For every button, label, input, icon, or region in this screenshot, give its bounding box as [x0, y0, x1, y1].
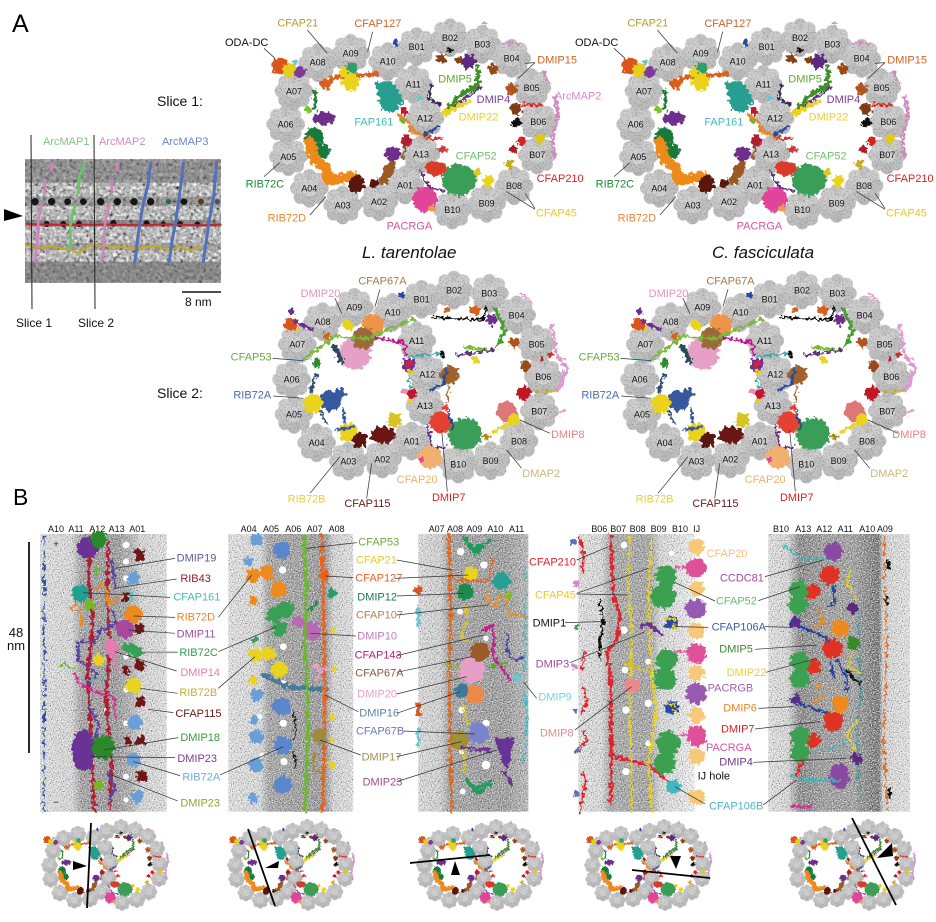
labels for panels 1 and 2: CFAP161	[173, 591, 220, 603]
panel: A10 to A01 view: A13	[109, 524, 125, 534]
doublet cross-section: L. tarentolae slice 2: B10	[450, 459, 466, 469]
ArcMAP2 filaments	[35, 163, 117, 262]
doublet cross-section: C. fasciculata slice 2: B08	[859, 436, 875, 446]
doublet cross-section: C. fasciculata slice 1: A06	[628, 120, 644, 130]
labels for panels 3 to 5: CFAP210	[529, 556, 576, 568]
doublet cross-section: L. tarentolae slice 1: A07	[286, 86, 302, 96]
tomogram captions	[16, 136, 221, 330]
panel letter A: A	[12, 10, 29, 38]
doublet cross-section: C. fasciculata slice 1: CFAP45	[886, 207, 927, 219]
labels for panels 3 to 5: CFAP45	[535, 590, 576, 602]
doublet cross-section: L. tarentolae slice 2: B09	[483, 456, 499, 466]
labels for panels 3 to 5: DMIP4	[719, 756, 753, 768]
doublet cross-section: L. tarentolae slice 1: ODA-DC	[225, 37, 268, 49]
doublet cross-section: L. tarentolae slice 1: DMIP4	[477, 94, 510, 106]
doublet cross-section: C. fasciculata slice 2: A11	[757, 336, 772, 346]
doublet cross-section: L. tarentolae slice 1: CFAP127	[354, 18, 401, 30]
doublet cross-section: L. tarentolae slice 1: A02	[371, 197, 387, 207]
panel: B10 to A09 view: A12	[816, 524, 832, 534]
panel: A07 to A11 view: A10	[487, 524, 503, 534]
plus and minus end markers: +	[53, 539, 59, 550]
panel: A07 to A11 view: A08	[447, 524, 463, 534]
doublet cross-section: L. tarentolae slice 1: A13	[413, 150, 429, 160]
doublet cross-section: L. tarentolae slice 2: A09	[346, 303, 362, 313]
doublet cross-section: L. tarentolae slice 2: B08	[511, 436, 527, 446]
orientation thumbnail 3	[410, 819, 543, 911]
panel: A04 to A08 view: A06	[285, 524, 301, 534]
labels for panels 1 and 2: RIB72A	[182, 771, 221, 783]
panel: A04 to A08 view	[218, 524, 361, 812]
labels for panels 3 to 5: CFAP20	[707, 548, 748, 560]
doublet cross-section: L. tarentolae slice 2: B07	[531, 406, 547, 416]
doublet cross-section: L. tarentolae slice 1: B05	[524, 83, 540, 93]
longitudinal panels 1 and 2	[40, 524, 404, 812]
panel: A04 to A08 view: A08	[329, 524, 345, 534]
doublet cross-section: L. tarentolae slice 1: A05	[280, 152, 296, 162]
doublet cross-section: L. tarentolae slice 1: A10	[380, 57, 396, 67]
doublet cross-section: L. tarentolae slice 2: DMIP7	[432, 492, 466, 504]
doublet cross-section: L. tarentolae slice 2: A11	[409, 336, 424, 346]
doublet cross-section: C. fasciculata slice 2: A07	[637, 340, 653, 350]
orientation thumbnail 1	[41, 819, 168, 911]
doublet cross-section: C. fasciculata slice 1: B06	[880, 117, 896, 127]
yellow CFAP45 strand	[26, 245, 200, 253]
doublet cross-section: L. tarentolae slice 1: B02	[442, 33, 458, 43]
doublet cross-section: C. fasciculata slice 1: A01	[747, 180, 763, 190]
doublet cross-section: L. tarentolae slice 2: A03	[340, 456, 356, 466]
panel: A10 to A01 view: A10	[48, 524, 64, 534]
tomogram captions: ArcMAP3	[162, 136, 208, 148]
doublet cross-section: C. fasciculata slice 1	[575, 17, 934, 232]
panel: B06 to IJ view: B09	[651, 524, 667, 534]
doublet cross-section: C. fasciculata slice 2: RIB72B	[636, 494, 674, 506]
doublet cross-section: C. fasciculata slice 2: A06	[632, 375, 648, 385]
labels for panels 3 to 5: PACRGA	[706, 742, 752, 754]
doublet cross-section: C. fasciculata slice 2: A02	[722, 454, 738, 464]
doublet cross-section: C. fasciculata slice 1: B04	[854, 54, 870, 64]
doublet cross-section: L. tarentolae slice 1: RIB72D	[268, 212, 306, 224]
doublet cross-section: C. fasciculata slice 2: DMAP2	[870, 468, 908, 480]
doublet cross-section: L. tarentolae slice 1: B04	[504, 54, 520, 64]
black microtubule-lumen dots row	[31, 198, 220, 227]
doublet cross-section: C. fasciculata slice 2: B09	[831, 456, 847, 466]
labels for panels 1 and 2: RIB72B	[179, 687, 217, 699]
doublet cross-section: C. fasciculata slice 1: B07	[879, 150, 895, 160]
doublet cross-section: L. tarentolae slice 1: CFAP21	[277, 17, 318, 29]
doublet cross-section: C. fasciculata slice 2: B10	[798, 459, 814, 469]
doublet cross-section: C. fasciculata slice 1: CFAP21	[627, 17, 668, 29]
doublet cross-section: C. fasciculata slice 2	[579, 271, 926, 510]
orientation thumbnail 2	[227, 819, 354, 911]
labels for panels 3 to 5: CFAP52	[716, 596, 757, 608]
doublet cross-section: C. fasciculata slice 1: RIB72D	[618, 212, 656, 224]
doublet cross-section: C. fasciculata slice 1: ODA-DC	[575, 37, 618, 49]
doublet cross-section: L. tarentolae slice 2: A02	[374, 454, 390, 464]
doublet cross-section: C. fasciculata slice 1: DMIP4	[827, 94, 860, 106]
panel: B06 to IJ view: B07	[610, 524, 626, 534]
doublet cross-section: L. tarentolae slice 1: A06	[278, 120, 294, 130]
doublet cross-section: C. fasciculata slice 1: DMIP22	[809, 111, 848, 123]
labels for panels 1 and 2: RIB43	[180, 573, 211, 585]
doublet cross-section: C. fasciculata slice 1: B03	[824, 40, 840, 50]
doublet cross-section: C. fasciculata slice 1: FAP161	[704, 116, 743, 128]
scale bar 48 nm	[7, 542, 29, 753]
doublet cross-section: C. fasciculata slice 2: B01	[762, 295, 778, 305]
labels for panels 1 and 2: CFAP143	[355, 650, 402, 662]
labels for panels 3 to 5: PACRGB	[708, 682, 753, 694]
labels for panels 3 to 5: DMIP6	[723, 703, 757, 715]
labels for panels 1 and 2: DMIP18	[180, 732, 220, 744]
labels for panels 3 to 5: DMIP22	[727, 667, 766, 679]
doublet cross-section: L. tarentolae slice 2: CFAP115	[344, 498, 391, 510]
doublet cross-section: L. tarentolae slice 1	[225, 17, 601, 232]
doublet cross-section: C. fasciculata slice 1: PACRGA	[737, 220, 783, 232]
doublet cross-section: L. tarentolae slice 1: ArcMAP2	[555, 90, 601, 102]
doublet cross-section: C. fasciculata slice 2: RIB72A	[581, 390, 620, 402]
doublet cross-section: L. tarentolae slice 2: DMIP20	[301, 288, 340, 300]
doublet cross-section: L. tarentolae slice 1: B03	[474, 40, 490, 50]
panel letter B: B	[13, 484, 28, 510]
doublet cross-section: C. fasciculata slice 2: DMIP8	[892, 429, 926, 441]
doublet cross-section: C. fasciculata slice 2: B02	[794, 285, 810, 295]
doublet cross-section: L. tarentolae slice 2: B02	[446, 285, 462, 295]
panel: A07 to A11 view: A11	[509, 524, 524, 534]
tomogram captions: Slice 2	[78, 316, 114, 330]
doublet cross-section: L. tarentolae slice 2: B05	[529, 339, 545, 349]
doublet cross-section: L. tarentolae slice 1: DMIP22	[459, 111, 498, 123]
doublet cross-section: L. tarentolae slice 2: CFAP53	[231, 352, 272, 364]
doublet cross-section: L. tarentolae slice 2: CFAP20	[397, 474, 438, 486]
labels for panels 1 and 2: DMIP11	[177, 629, 216, 641]
doublet cross-section: C. fasciculata slice 1: B05	[874, 83, 890, 93]
labels for panels 1 and 2: CFAP67A	[355, 667, 404, 679]
labels for panels 3 to 5: DMIP3	[536, 659, 569, 671]
doublet cross-section: C. fasciculata slice 2: A10	[733, 308, 749, 318]
doublet cross-section: L. tarentolae slice 1: B01	[409, 42, 425, 52]
doublet cross-section: L. tarentolae slice 1: CFAP45	[536, 207, 577, 219]
doublet cross-section: L. tarentolae slice 1: CFAP210	[537, 173, 584, 185]
doublet cross-section: L. tarentolae slice 2	[231, 271, 585, 510]
panel: B10 to A09 view: A11	[838, 524, 853, 534]
labels for panels 3 to 5: CFAP106B	[709, 800, 763, 812]
labels for panels 3 to 5: DMIP8	[540, 727, 574, 739]
panel: A10 to A01 view: A12	[89, 524, 105, 534]
doublet cross-section: L. tarentolae slice 1: A03	[335, 200, 351, 210]
doublet cross-section: C. fasciculata slice 1: CFAP52	[806, 150, 847, 162]
labels for panels 1 and 2: DMIP19	[177, 553, 216, 565]
doublet cross-section: C. fasciculata slice 1: A11	[756, 80, 771, 90]
doublet cross-section: L. tarentolae slice 2: A05	[286, 410, 302, 420]
ArcMAP1 filament	[67, 163, 85, 248]
doublet cross-section: L. tarentolae slice 2: RIB72A	[233, 390, 272, 402]
panel: B10 to A09 view: A09	[877, 524, 893, 534]
doublet cross-section: C. fasciculata slice 1: DMIP5	[788, 74, 822, 86]
panel: A07 to A11 view: A07	[429, 524, 445, 534]
plus and minus end markers: −	[53, 797, 59, 808]
doublet cross-section: C. fasciculata slice 2: CFAP67A	[706, 275, 755, 287]
doublet cross-section: C. fasciculata slice 2: A09	[694, 303, 710, 313]
doublet cross-section: C. fasciculata slice 1: B09	[829, 199, 845, 209]
doublet cross-section: L. tarentolae slice 1: CFAP52	[456, 150, 497, 162]
orientation thumbnail 4	[584, 819, 711, 911]
doublet cross-section: C. fasciculata slice 1: A08	[660, 58, 676, 68]
doublet cross-section: L. tarentolae slice 2: RIB72B	[288, 494, 326, 506]
labels for panels 1 and 2: DMIP10	[357, 631, 397, 643]
panel: B10 to A09 view: A10	[859, 524, 875, 534]
scale bar 48 nm: nm	[7, 638, 25, 653]
scale bar 48 nm: 48	[9, 625, 23, 640]
labels for panels 3 to 5: DMIP9	[538, 691, 572, 703]
doublet cross-section: C. fasciculata slice 1: A04	[651, 184, 667, 194]
orientation thumbnail 5	[788, 818, 915, 911]
doublet cross-section: L. tarentolae slice 2: DMAP2	[522, 468, 560, 480]
labels for panels 1 and 2: DMIP20	[357, 689, 397, 701]
labels for panels 1 and 2: CFAP53	[358, 536, 399, 548]
doublet cross-section: C. fasciculata slice 2: A04	[657, 438, 673, 448]
tomogram captions: 8 nm	[185, 295, 212, 309]
panel: B06 to IJ view: B06	[591, 524, 607, 534]
doublet cross-section: C. fasciculata slice 2: A12	[767, 369, 783, 379]
species label L. tarentolae: L. tarentolae	[362, 243, 457, 262]
doublet cross-section: C. fasciculata slice 2: B04	[857, 310, 873, 320]
doublet cross-section: C. fasciculata slice 1: B08	[856, 181, 872, 191]
labels for panels 3 to 5: CCDC81	[720, 572, 764, 584]
tomogram captions: ArcMAP2	[99, 136, 145, 148]
panel: A07 to A11 view	[395, 524, 537, 812]
doublet cross-section: L. tarentolae slice 2: A06	[284, 375, 300, 385]
labels for panels 1 and 2	[173, 536, 404, 809]
tomogram captions: ArcMAP1	[43, 136, 89, 148]
doublet cross-section: L. tarentolae slice 1: A08	[310, 58, 326, 68]
labels for panels 3 to 5: CFAP106A	[712, 621, 767, 633]
doublet cross-section: C. fasciculata slice 2: DMIP20	[649, 288, 688, 300]
doublet cross-section: C. fasciculata slice 1: B01	[759, 42, 775, 52]
labels for panels 1 and 2: DMIP23	[177, 753, 217, 765]
doublet cross-section: L. tarentolae slice 1: DMIP15	[537, 55, 577, 67]
doublet cross-section: C. fasciculata slice 2: CFAP115	[692, 498, 739, 510]
labels for panels 1 and 2: DMIP17	[362, 751, 401, 763]
doublet cross-section: L. tarentolae slice 2: A04	[309, 438, 325, 448]
doublet cross-section: C. fasciculata slice 1: A03	[685, 200, 701, 210]
doublet cross-section: L. tarentolae slice 2: B04	[509, 310, 525, 320]
doublet cross-section: L. tarentolae slice 1: FAP161	[354, 116, 393, 128]
doublet cross-section: C. fasciculata slice 2: B06	[883, 372, 899, 382]
labels for panels 3 to 5: IJ hole	[698, 770, 730, 782]
red CFAP210 strand	[27, 224, 221, 225]
doublet cross-section: L. tarentolae slice 2: A07	[289, 340, 305, 350]
panel: A07 to A11 view: A09	[466, 524, 482, 534]
doublet cross-section: C. fasciculata slice 2: A01	[752, 436, 768, 446]
doublet cross-section: L. tarentolae slice 1: DMIP5	[438, 74, 472, 86]
doublet cross-section: C. fasciculata slice 1: A10	[730, 57, 746, 67]
doublet cross-section: C. fasciculata slice 2: B07	[879, 406, 895, 416]
labels for panels 1 and 2: DMIP16	[359, 707, 399, 719]
panel: A10 to A01 view	[40, 524, 180, 812]
doublet cross-section: C. fasciculata slice 1: A02	[721, 197, 737, 207]
labels for panels 1 and 2: DMIP14	[180, 667, 220, 679]
labels for panels 1 and 2: CFAP115	[175, 708, 222, 720]
doublet cross-section: C. fasciculata slice 1: A12	[767, 114, 783, 124]
doublet cross-section: L. tarentolae slice 1: RIB72C	[246, 179, 284, 191]
labels for panels 1 and 2: DMIP23	[180, 797, 220, 809]
panel: A10 to A01 view: A11	[68, 524, 84, 534]
doublet cross-section: C. fasciculata slice 2: A13	[765, 401, 781, 411]
panel: A10 to A01 view: A01	[129, 524, 145, 534]
panel: B06 to IJ view: B10	[672, 524, 688, 534]
doublet cross-section: C. fasciculata slice 2: CFAP53	[579, 352, 620, 364]
labels for panels 1 and 2: CFAP21	[356, 555, 397, 567]
doublet cross-section: L. tarentolae slice 1: B09	[479, 199, 495, 209]
labels for panels 1 and 2: CFAP107	[356, 610, 403, 622]
doublet cross-section: L. tarentolae slice 1: B06	[530, 117, 546, 127]
doublet cross-section: C. fasciculata slice 2: A03	[688, 456, 704, 466]
row label Slice 1: Slice 1:	[157, 93, 203, 109]
panel: B10 to A09 view: A13	[795, 524, 811, 534]
doublet cross-section: L. tarentolae slice 2: B06	[535, 372, 551, 382]
doublet cross-section: C. fasciculata slice 1: DMIP15	[887, 55, 927, 67]
species label C. fasciculata: C. fasciculata	[712, 243, 814, 262]
doublet cross-section: L. tarentolae slice 2: A10	[385, 308, 401, 318]
doublet cross-section: C. fasciculata slice 2: B05	[877, 339, 893, 349]
doublet cross-section: C. fasciculata slice 1: B02	[792, 33, 808, 43]
doublet cross-section: C. fasciculata slice 1: CFAP127	[704, 18, 751, 30]
doublet cross-section: L. tarentolae slice 1: PACRGA	[387, 220, 433, 232]
doublet cross-section: L. tarentolae slice 2: B01	[414, 295, 430, 305]
doublet cross-section: C. fasciculata slice 1: A13	[763, 150, 779, 160]
doublet cross-section: L. tarentolae slice 2: CFAP67A	[358, 275, 407, 287]
labels for panels 1 and 2: RIB72D	[177, 611, 215, 623]
labels for panels 1 and 2: CFAP67B	[356, 726, 404, 738]
panel: B06 to IJ view	[565, 524, 715, 812]
doublet cross-section: C. fasciculata slice 1: A07	[636, 86, 652, 96]
doublet cross-section: L. tarentolae slice 1: A11	[406, 80, 421, 90]
doublet cross-section: L. tarentolae slice 2: A13	[417, 401, 433, 411]
doublet cross-section: C. fasciculata slice 1: A09	[693, 49, 709, 59]
doublet cross-section: L. tarentolae slice 1: A12	[417, 114, 433, 124]
doublet cross-section: C. fasciculata slice 2: A08	[663, 317, 679, 327]
panel: A04 to A08 view: A05	[263, 524, 279, 534]
slice position lines and arrowhead	[4, 135, 95, 309]
longitudinal panels 3, 4 and 5	[395, 524, 910, 812]
doublet cross-section: C. fasciculata slice 2: A05	[634, 410, 650, 420]
panel: B06 to IJ view: IJ	[693, 524, 700, 534]
labels for panels 3 to 5: DMIP1	[533, 617, 566, 629]
doublet cross-section: L. tarentolae slice 2: A08	[315, 317, 331, 327]
panel: A04 to A08 view: A07	[307, 524, 323, 534]
tomogram slice panel with ArcMAP filaments	[25, 159, 221, 283]
doublet cross-section: L. tarentolae slice 1: A09	[343, 49, 359, 59]
panel: B10 to A09 view: B10	[773, 524, 789, 534]
doublet cross-section: C. fasciculata slice 1: B10	[794, 205, 810, 215]
plus and minus end markers	[51, 539, 61, 808]
ArcMAP3 filaments	[135, 163, 217, 262]
doublet cross-section: C. fasciculata slice 1: RIB72C	[596, 179, 634, 191]
doublet cross-section: L. tarentolae slice 1: A01	[397, 180, 413, 190]
labels for panels 3 to 5	[529, 548, 767, 812]
doublet cross-section: L. tarentolae slice 2: B03	[481, 289, 497, 299]
labels for panels 1 and 2: RIB72C	[179, 647, 218, 659]
panel: A04 to A08 view: A04	[241, 524, 257, 534]
labels for panels 1 and 2: DMIP23	[363, 776, 402, 788]
labels for panels 3 to 5: DMIP5	[719, 644, 753, 656]
doublet cross-section: L. tarentolae slice 2: A01	[404, 436, 420, 446]
doublet cross-section: L. tarentolae slice 1: B08	[506, 181, 522, 191]
doublet cross-section: C. fasciculata slice 2: CFAP20	[745, 474, 786, 486]
doublet cross-section: L. tarentolae slice 1: B07	[529, 150, 545, 160]
doublet cross-section: C. fasciculata slice 2: DMIP7	[780, 492, 814, 504]
panel: B10 to A09 view	[753, 524, 910, 812]
labels for panels 1 and 2: CFAP127	[355, 572, 402, 584]
doublet cross-section: C. fasciculata slice 2: B03	[829, 289, 845, 299]
doublet cross-section: C. fasciculata slice 1: A05	[630, 152, 646, 162]
doublet cross-section: L. tarentolae slice 2: DMIP8	[551, 429, 585, 441]
doublet cross-section: C. fasciculata slice 1: CFAP210	[887, 173, 934, 185]
doublet cross-section: L. tarentolae slice 1: A04	[301, 184, 317, 194]
panel: B06 to IJ view: B08	[630, 524, 646, 534]
doublet cross-section: L. tarentolae slice 2: A12	[419, 369, 435, 379]
row label Slice 2: Slice 2:	[157, 385, 203, 401]
doublet cross-section: L. tarentolae slice 1: B10	[444, 205, 460, 215]
labels for panels 1 and 2: DMIP12	[357, 591, 397, 603]
tomogram captions: Slice 1	[16, 316, 52, 330]
labels for panels 3 to 5: DMIP7	[721, 724, 755, 736]
